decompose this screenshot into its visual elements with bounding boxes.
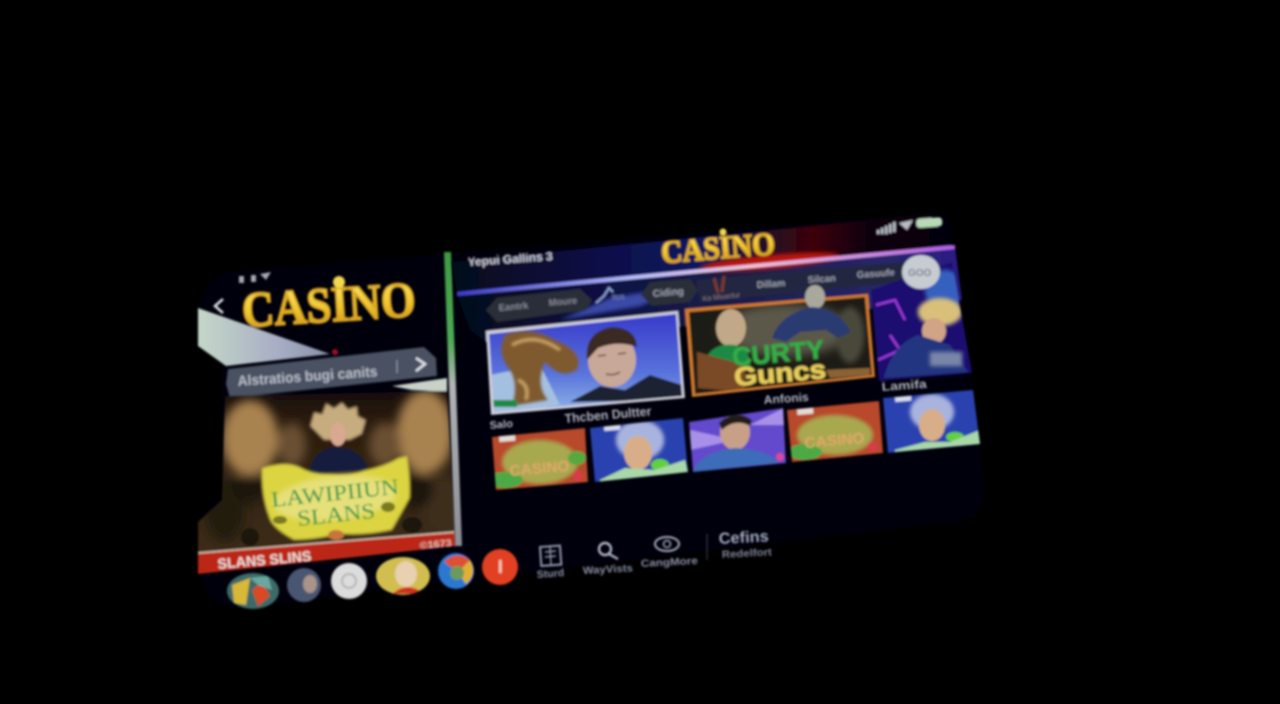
card title <box>731 334 827 392</box>
search pill <box>226 347 437 398</box>
avatar: grey portrait <box>287 568 321 602</box>
icon: status indicators <box>239 272 271 283</box>
card title: CURTY <box>731 334 825 372</box>
nav item: eye: CangMore <box>641 555 698 570</box>
nav item: store: Sturd <box>536 567 565 581</box>
right casino logo: CASINO <box>660 225 776 270</box>
banner title: LAWIPIIUN <box>270 474 400 512</box>
header title text: Yepui Gallins 3 <box>467 249 553 269</box>
category band <box>457 247 962 345</box>
avatar: colorful ring <box>438 553 474 589</box>
red title bar <box>198 532 456 574</box>
thumbnail: smiling man <box>685 405 790 475</box>
panel: left promo <box>190 271 467 574</box>
hero artwork <box>197 390 455 554</box>
search pill: Alstratios bugi canits <box>237 364 378 390</box>
avatar: blonde portrait <box>376 557 430 595</box>
banner title <box>270 478 398 527</box>
category band tabs: Silcan <box>807 273 836 286</box>
badge: round mascot: GOO <box>908 268 932 279</box>
thumbnail: blonde woman 1 <box>588 416 690 484</box>
category band tabs <box>696 262 905 303</box>
card labels: Thcben Dultter <box>564 403 652 426</box>
left casino logo: CASINO <box>240 271 417 338</box>
icon: alert badge <box>482 549 518 585</box>
card title: Guncs <box>733 354 827 392</box>
right light strip <box>392 378 447 392</box>
featured card: Thcben Dultter <box>480 305 690 420</box>
avatar row <box>227 549 518 609</box>
thumbnail: casino salad 1 <box>490 426 590 492</box>
category pill left <box>486 289 592 322</box>
phone body <box>198 213 984 608</box>
thumbnail: blonde woman 2 <box>882 388 982 454</box>
thumbnail: casino salad 2: CASINO <box>804 430 865 452</box>
avatar: multicolor art <box>227 573 279 609</box>
category pill selected <box>641 279 698 306</box>
thumbnail: casino salad 2 <box>786 400 884 464</box>
featured card: Curty Guncs <box>680 285 880 400</box>
featured card: Lamifa <box>871 262 973 382</box>
category band tabs: Dillam <box>756 278 786 291</box>
category pill selected: Ciding <box>652 286 684 300</box>
category pill left: Eantrk <box>498 300 529 314</box>
icon: signal, wifi, battery <box>877 217 943 234</box>
nav item: coins: Cefins <box>718 528 769 548</box>
vertical panel divider <box>444 252 462 546</box>
panel: right lobby <box>452 214 988 581</box>
man above frame <box>772 285 851 342</box>
blue swoop <box>560 285 690 320</box>
avatar: white badge <box>331 563 367 599</box>
category pill left: Moure <box>548 296 578 309</box>
badge: round mascot <box>902 255 940 289</box>
category tab with icon: Itos <box>611 292 625 302</box>
category band tabs: Ka Misanfur <box>702 292 741 303</box>
category band tabs: Gasuufe <box>856 267 895 281</box>
nav item: store <box>536 546 565 581</box>
nav item: search <box>583 543 633 577</box>
nav item: coins: Redelfort <box>722 546 773 561</box>
card labels <box>489 377 927 432</box>
top header band <box>452 214 955 295</box>
category tab with icon <box>596 288 625 303</box>
icon: back arrow <box>215 299 223 313</box>
phone photo scene <box>196 213 984 610</box>
red glow <box>700 249 840 275</box>
thumbnail: casino salad 1: CASINO <box>509 458 570 480</box>
red title bar: ©1673 <box>419 538 453 552</box>
card labels: Salo <box>489 418 514 432</box>
bottom navigation <box>536 528 773 581</box>
diagonal light wedge <box>198 308 330 366</box>
card labels: Anfonis <box>763 390 809 407</box>
card labels: Lamifa <box>881 377 927 394</box>
nav item: eye <box>641 537 698 570</box>
glowing divider line <box>457 245 955 296</box>
banner title: SLANS <box>296 498 376 531</box>
nav item: coins <box>718 528 773 561</box>
red title bar: SLANS SLINS <box>217 549 312 573</box>
nav item: search: WayVists <box>583 562 633 577</box>
